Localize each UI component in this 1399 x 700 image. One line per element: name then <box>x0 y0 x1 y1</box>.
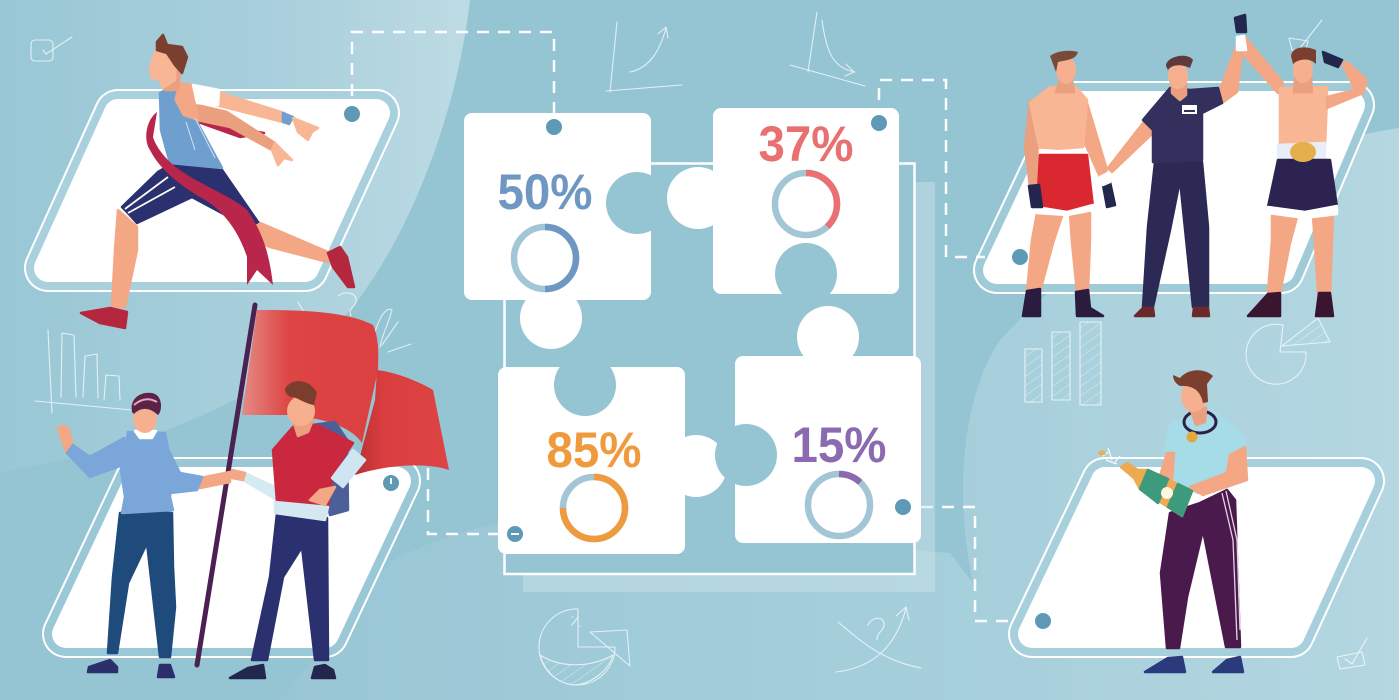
value 15%: 15% <box>792 417 886 473</box>
panel: runner card <box>48 113 376 268</box>
frame behind puzzle <box>504 164 914 574</box>
doodle: checkbox top left <box>31 37 72 61</box>
connector: runner to 50% <box>352 32 554 118</box>
doodle: checkbox bottom right <box>1337 638 1367 669</box>
ring 15% <box>808 474 870 536</box>
puzzle piece: 50% <box>464 113 668 349</box>
card dot: champagne <box>1035 613 1051 629</box>
doodle: falling line chart <box>790 12 865 86</box>
ring 50% <box>514 227 576 289</box>
doodle: checkbox top right <box>1289 20 1322 50</box>
figure: runner with ribbon <box>81 35 354 328</box>
anchor dot <box>871 115 887 131</box>
anchor dot <box>895 499 911 515</box>
anchor dot <box>546 119 562 135</box>
doodle: question arrow <box>836 607 921 672</box>
figure: woman in hoodie <box>58 393 230 677</box>
figure: flags and pole <box>197 305 449 665</box>
ring 37% <box>775 173 837 235</box>
card dot: flag <box>383 475 399 491</box>
ring 85% <box>563 477 625 539</box>
connector: 15% to champagne <box>921 507 1012 621</box>
value 85%: 85% <box>546 422 642 478</box>
doodle: question and rays <box>298 293 411 352</box>
card dot: boxing <box>1012 249 1028 265</box>
panel: flag card <box>66 481 397 634</box>
puzzle piece: 85% <box>498 354 727 554</box>
puzzle piece: 15% <box>715 306 921 543</box>
figure: man with backpack <box>230 381 365 678</box>
anchor dot <box>507 526 523 542</box>
connector: 85% to flag <box>428 468 500 534</box>
doodle: bottom pie chart <box>539 609 630 685</box>
panel: champagne card <box>1032 481 1361 634</box>
value 37%: 37% <box>758 116 854 172</box>
value 50%: 50% <box>498 164 592 220</box>
doodle: rising line chart <box>606 22 682 92</box>
figure: referee <box>1108 45 1243 316</box>
backing light rectangle <box>523 182 935 592</box>
panel: boxing card <box>997 105 1351 270</box>
card dot: runner <box>344 106 360 122</box>
figure: champagne man <box>1098 370 1247 672</box>
doodle: left bar chart <box>35 330 132 413</box>
doodle: hatched bars <box>1025 322 1101 405</box>
figure: left boxer <box>1023 51 1115 316</box>
puzzle piece: 37% <box>667 108 899 305</box>
doodle: pie chart right <box>1246 318 1330 384</box>
figure: winning boxer <box>1235 15 1367 316</box>
connector: 37% to boxing <box>879 80 985 257</box>
